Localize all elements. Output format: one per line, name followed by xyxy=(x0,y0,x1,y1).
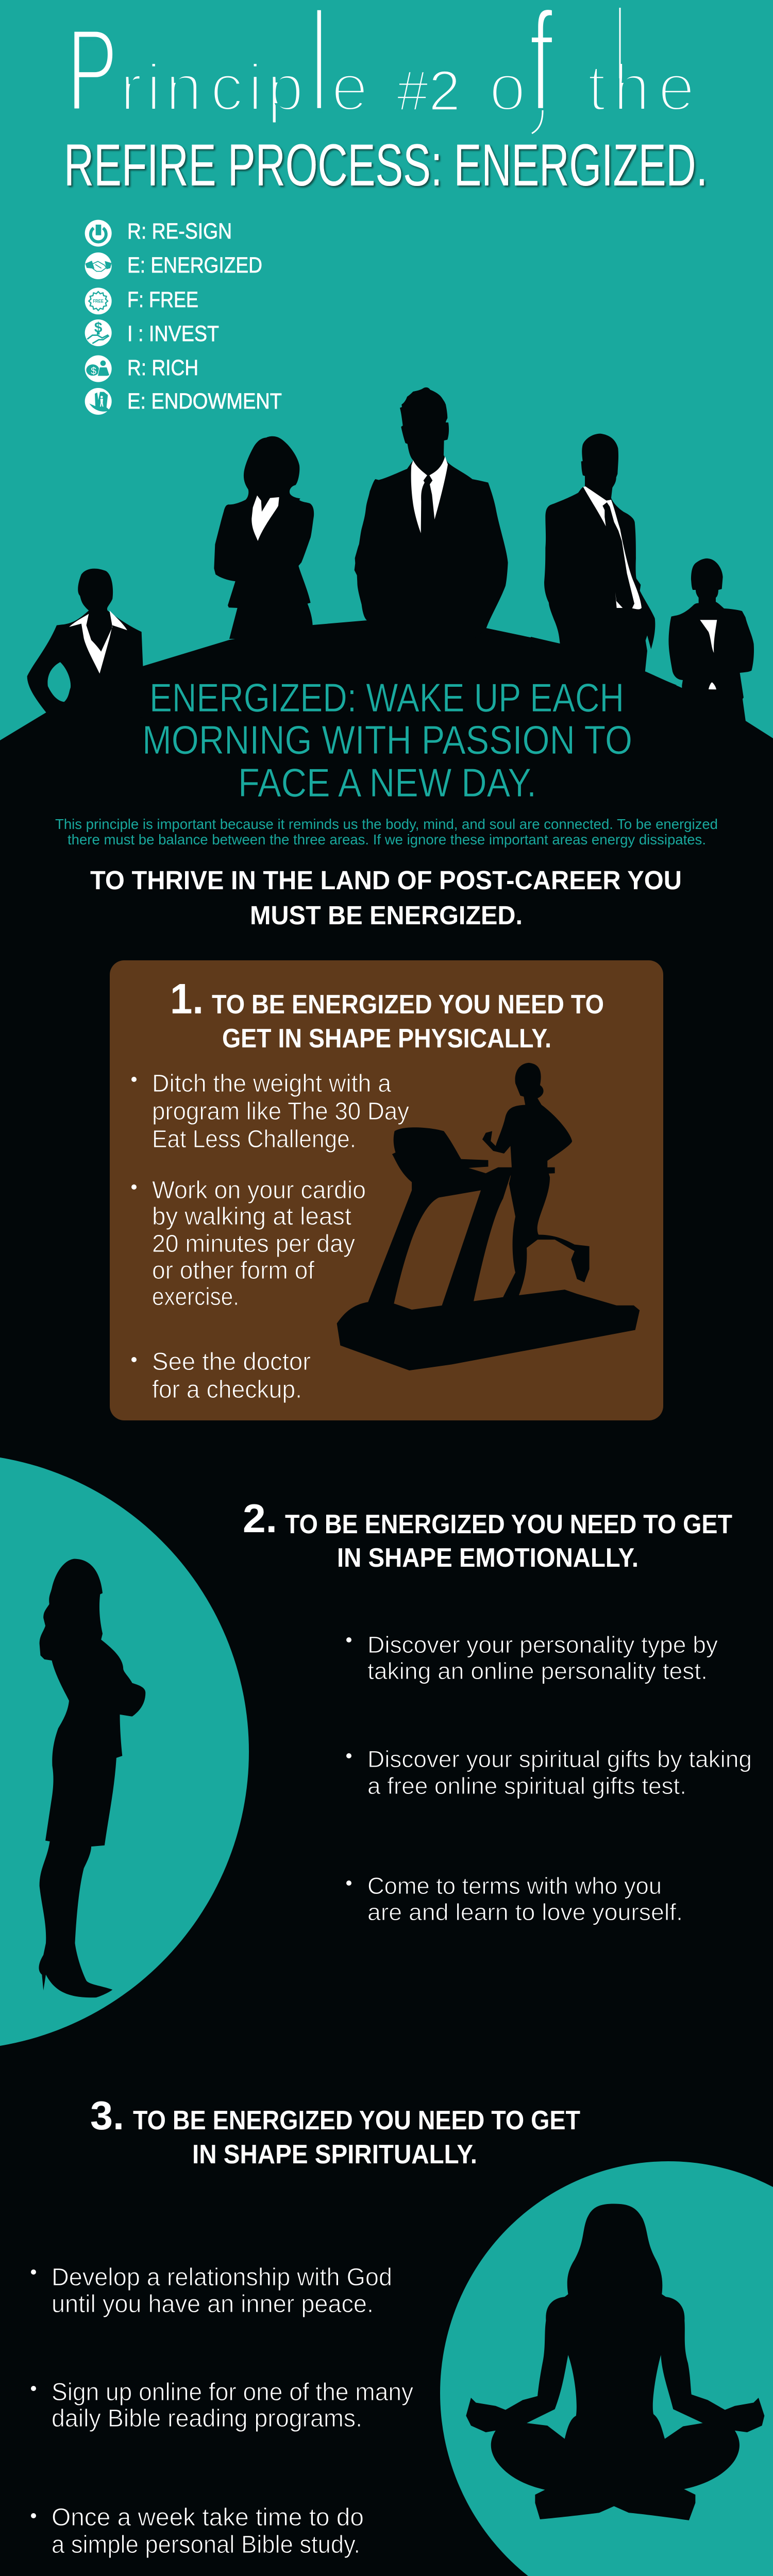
title: Principle #2 of the: e xyxy=(331,51,368,125)
step 2 bullets: Come to terms with who you xyxy=(367,1873,662,1899)
silhouette: meditating woman xyxy=(466,2204,764,2520)
label: F free: F: FREE xyxy=(127,287,198,312)
step 1 bullets: for a checkup. xyxy=(152,1376,302,1403)
step 2 bullets: are and learn to love yourself. xyxy=(367,1899,683,1925)
step 3 heading xyxy=(90,2093,580,2170)
title: Principle #2 of the: #2 xyxy=(397,59,460,123)
step 1 bullets: Ditch the weight with a xyxy=(152,1070,391,1097)
step 2 heading: IN SHAPE EMOTIONALLY. xyxy=(337,1543,638,1573)
heading: energized wake up xyxy=(142,675,632,805)
step 1 bullets: Work on your cardio xyxy=(152,1177,366,1204)
intro paragraph: there must be balance between the three areas. If we ignore these important areas energy dissipates. xyxy=(68,832,706,848)
heading: energized wake up: FACE A NEW DAY. xyxy=(238,760,536,805)
step 1 bullets: or other form of xyxy=(152,1257,315,1284)
teal header background xyxy=(0,0,773,744)
teal circle xyxy=(440,2161,773,2576)
step 1 bullets: See the doctor xyxy=(152,1348,311,1376)
heading: energized wake up: MORNING WITH PASSION TO xyxy=(142,717,632,762)
step 2 bullets: Discover your spiritual gifts by taking xyxy=(367,1746,752,1772)
step 1 bullets xyxy=(131,1070,409,1403)
step 2 heading: 2. xyxy=(243,1496,277,1541)
title: Principle #2 of the xyxy=(67,0,695,141)
step 3 heading: TO BE ENERGIZED YOU NEED TO GET xyxy=(133,2106,580,2136)
panel: step 1 physically xyxy=(110,960,663,1420)
step 1 bullets: 20 minutes per day xyxy=(152,1230,355,1258)
label: E energized: E: ENERGIZED xyxy=(127,253,262,278)
icon: invest hand xyxy=(85,319,112,346)
step 3 bullets: Sign up online for one of the many xyxy=(52,2379,413,2406)
heading: to thrive: MUST BE ENERGIZED. xyxy=(250,901,523,930)
step 3 bullets: Once a week take time to do xyxy=(52,2504,364,2531)
step 3 bullets xyxy=(31,2264,413,2558)
silhouette: second woman xyxy=(214,436,320,639)
step 3 heading: IN SHAPE SPIRITUALLY. xyxy=(192,2140,477,2170)
hill xyxy=(0,620,773,876)
icon: invest hand: $ xyxy=(94,319,103,335)
step 2 bullets: a free online spiritual gifts test. xyxy=(367,1773,686,1799)
step 1 heading: TO BE ENERGIZED YOU NEED TO xyxy=(212,990,604,1020)
step 3 bullets: a simple personal Bible study. xyxy=(52,2531,360,2558)
silhouette: far right man xyxy=(668,558,754,721)
silhouette: centre man xyxy=(354,387,508,639)
label: R re-sign: R: RE-SIGN xyxy=(127,219,232,244)
icon: free badge xyxy=(85,287,112,314)
silhouette: left woman xyxy=(27,569,143,717)
step 3 bullets: Develop a relationship with God xyxy=(52,2264,392,2291)
heading: to thrive xyxy=(90,866,682,930)
step 2 bullets xyxy=(346,1632,752,1925)
icon: free badge: FREE xyxy=(93,299,104,304)
step 3 bullets: daily Bible reading programs. xyxy=(52,2405,362,2432)
heading: energized wake up: ENERGIZED: WAKE UP EACH xyxy=(149,675,624,720)
step 2 bullets: taking an online personality test. xyxy=(367,1658,708,1684)
step 3 bullets: until you have an inner peace. xyxy=(52,2291,374,2318)
hill and business silhouettes xyxy=(0,387,773,876)
step 1 heading: GET IN SHAPE PHYSICALLY. xyxy=(222,1024,551,1054)
silhouette: standing woman xyxy=(39,1559,145,1997)
step 3 heading: 3. xyxy=(90,2093,124,2138)
intro paragraph: This principle is important because it reminds us the body, mind, and soul are connected. To be energized xyxy=(55,816,718,832)
step 1 heading xyxy=(170,975,604,1054)
step 1 bullets: Eat Less Challenge. xyxy=(152,1126,356,1153)
step 2 bullets: Discover your personality type by xyxy=(367,1632,718,1658)
icon: handshake xyxy=(85,252,112,279)
card background xyxy=(110,960,663,1420)
acronym list xyxy=(85,219,282,415)
step 1 bullets: program like The 30 Day xyxy=(152,1098,409,1125)
step 1 bullets: exercise. xyxy=(152,1283,239,1311)
title: Principle #2 of the: rincip xyxy=(120,51,304,125)
label: R rich: R: RICH xyxy=(127,355,198,380)
icon: rich person xyxy=(85,355,112,382)
silhouette: treadmill runner xyxy=(337,1063,640,1370)
step 1 heading: 1. xyxy=(170,975,204,1023)
icon: endowment hand xyxy=(85,388,112,415)
panel: step 3 spiritually xyxy=(31,2093,773,2576)
title: Principle #2 of the: the xyxy=(587,51,695,125)
icon: power xyxy=(85,220,112,247)
silhouette: right man xyxy=(531,434,677,685)
heading: to thrive: TO THRIVE IN THE LAND OF POST-CAREER YOU xyxy=(90,866,682,895)
title: Principle #2 of the: P xyxy=(67,5,117,135)
title: Principle #2 of the: o xyxy=(489,51,526,125)
label: E endowment: E: ENDOWMENT xyxy=(127,389,282,414)
label: I invest: I : INVEST xyxy=(127,321,219,346)
panel: step 2 emotionally xyxy=(0,1453,752,2050)
step 2 heading xyxy=(243,1496,732,1573)
icon: rich person: $ xyxy=(91,366,96,377)
intro paragraph xyxy=(55,816,718,848)
teal circle xyxy=(0,1453,249,2050)
step 2 heading: TO BE ENERGIZED YOU NEED TO GET xyxy=(285,1510,732,1539)
step 1 bullets: by walking at least xyxy=(152,1203,351,1230)
